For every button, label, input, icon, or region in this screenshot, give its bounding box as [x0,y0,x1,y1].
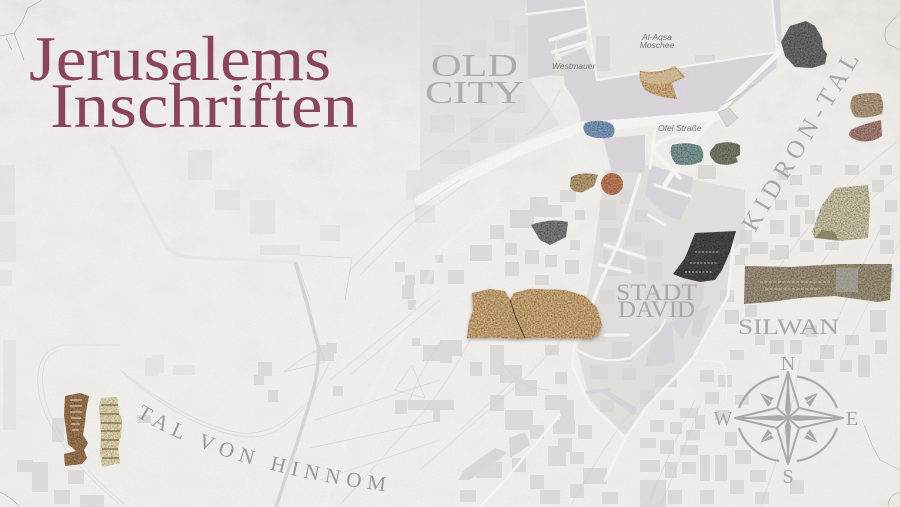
label: Kidron-Tal: KIDRON-TAL [737,48,865,236]
fragment dark chipped corner [815,230,838,240]
map: purple archaeological areas [527,0,782,416]
map: Temple Mount plaza [585,0,777,80]
artifact: large limestone tablet [467,289,602,339]
title [29,24,358,141]
compass letters: S [782,466,794,488]
title line 2: Inschriften [50,71,358,141]
artifact: right upper bulla [850,93,883,118]
label: Silwan: SILWAN [738,314,839,339]
tablet inscription marks [685,252,720,272]
label: Al-Aqsa Moschee: Moschee [640,40,675,50]
compass main star [735,372,843,464]
map: Old City zone [420,0,560,195]
compass letters: N [781,353,795,375]
label: Ofel Straße: Ofel Straße [658,123,702,133]
artifact: grey-olive bulla [710,142,740,165]
tablet crack [510,300,525,338]
label: Old City: CITY [425,74,524,110]
strip inscription marks [760,282,830,289]
artifact: pale limestone fragment [812,185,870,241]
background: marble paper [6,0,900,94]
label: Old City: OLD [431,47,518,83]
scroll dark bands [100,405,121,458]
map: City of David zone [577,165,745,435]
label: Stadt David: DAVID [618,297,695,322]
compass letters: E [846,408,858,430]
artifact: dark silver scroll [64,393,89,466]
label: Tal von Hinnom: TAL VON HINNOM [138,404,386,492]
map: Hinnom ravine grey path [276,262,318,507]
artifact: potsherd near Al-Aqsa [640,66,685,99]
artifact: right lower bulla [849,120,882,141]
map: gate outline near Ofel [718,84,755,127]
artifact: copper bulla [601,173,623,195]
map: Hinnom ravine lighter fade at top [112,145,295,262]
label: Old City [425,47,524,110]
compass minor points [760,393,818,443]
label: Stadt David: STADT [616,280,697,305]
curve for Tal von Hinnom label [136,416,392,492]
artifact: grey inscribed shard [531,221,568,245]
artifact: tan bulla [570,173,598,192]
map: white roads [325,0,790,507]
artifact: dark stone seal [781,21,827,68]
compass letters: W [714,408,733,430]
artifact: black inscribed tablet [673,231,736,282]
compass ring [739,376,837,461]
label: Al-Aqsa Moschee [640,32,675,50]
label: Al-Aqsa Moschee: Al-Aqsa [641,32,672,42]
scroll pale bands [70,400,82,430]
map: big building silhouette [458,432,530,480]
artifact: Siloam inscription strip [744,264,892,304]
title line 1: Jerusalems [29,24,331,94]
icon: compass rose [735,372,843,464]
map: faint western building footprints [0,20,526,430]
label: Stadt David [616,280,697,322]
map: grey contour lines [38,90,900,507]
strip pale blotch [836,268,858,292]
compass centre fill [735,372,843,464]
label: Westmauer: Westmauer [552,61,596,71]
artifact: blue seal [583,121,614,138]
artifact: teal bulla [671,143,703,165]
potsherd pale upper band [641,68,682,84]
artifact: pale silver scroll [99,397,122,467]
compass letters [714,353,858,488]
